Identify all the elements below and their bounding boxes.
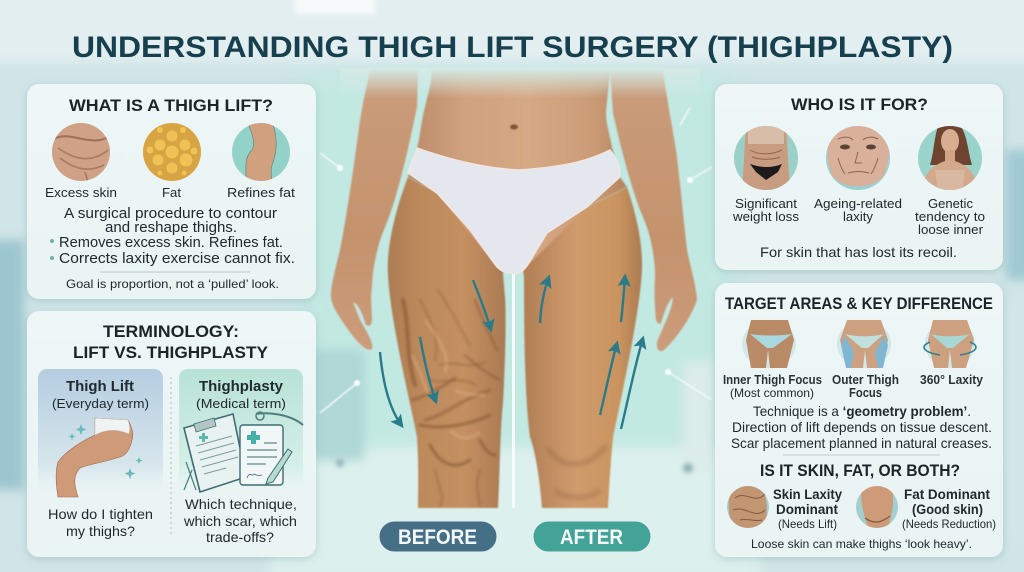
photo: genetic tendency (918, 126, 982, 190)
audience labels: Significant (735, 196, 797, 211)
heading: WHO IS IT FOR? (791, 95, 928, 114)
icon: clipboard and medical document (184, 412, 303, 492)
column: thighplasty: which scar, which (183, 513, 297, 529)
icon: leg side view (56, 418, 142, 497)
skin dimples on left thigh (403, 290, 500, 505)
technique description (731, 403, 992, 451)
column: thighplasty (179, 369, 303, 545)
column: thigh lift: my thighs? (66, 523, 135, 539)
target labels: (Most common) (730, 386, 814, 400)
column: thighplasty: (Medical term) (196, 396, 286, 411)
panel: what is a thigh lift: Fat (162, 185, 181, 200)
subheading: IS IT SKIN, FAT, OR BOTH? (760, 461, 960, 480)
heading: TARGET AREAS & KEY DIFFERENCE (725, 294, 993, 313)
icon: excess skin (52, 123, 110, 181)
question: Which technique, (185, 496, 297, 512)
top fade over body (340, 68, 700, 98)
panel: terminology (27, 311, 316, 557)
column: thigh lift: Thigh Lift (66, 378, 134, 395)
description: A surgical procedure to contour (64, 206, 277, 222)
before label: BEFORE (398, 526, 477, 549)
skin laxity label: Dominant (776, 502, 838, 517)
left thigh before surgery (388, 177, 506, 508)
description: Removes excess skin. Refines fat. (59, 235, 283, 251)
audience labels: Ageing-related (814, 196, 902, 211)
panel: target areas and key difference (715, 283, 1003, 557)
column: thighplasty: trade-offs? (206, 529, 274, 545)
description (50, 206, 295, 267)
icon: refines fat (232, 123, 290, 181)
thumb: inner thigh (742, 320, 796, 368)
icon: fat (143, 123, 201, 181)
technique description: Technique is a ‘geometry problem’. (753, 403, 971, 419)
fat dominant label (902, 487, 996, 531)
right thigh after surgery (523, 187, 642, 508)
heading: WHAT IS A THIGH LIFT? (69, 96, 273, 115)
target labels: Outer Thigh (832, 373, 899, 387)
skin laxity label: Skin Laxity (773, 487, 842, 502)
fat dominant label: (Needs Reduction) (902, 517, 996, 531)
right knee shading (548, 445, 606, 498)
after label: AFTER (560, 526, 623, 549)
fat dominant label: (Good skin) (912, 502, 983, 517)
skin laxity label: (Needs Lift) (778, 517, 837, 531)
target labels: Inner Thigh Focus (723, 373, 822, 387)
summary: For skin that has lost its recoil. (760, 244, 957, 260)
right arm and hand (610, 70, 697, 351)
photo: ageing-related laxity (826, 126, 890, 190)
question: How do I tighten (48, 506, 153, 522)
column: thigh lift (38, 369, 163, 539)
heading: LIFT VS. THIGHPLASTY (73, 343, 269, 362)
heading: TERMINOLOGY: (103, 322, 239, 341)
navel (510, 124, 518, 130)
title: UNDERSTANDING THIGH LIFT SURGERY (THIGHPLASTY) (72, 31, 953, 64)
description: Corrects laxity exercise cannot fix. (59, 251, 295, 267)
target labels (723, 373, 983, 400)
heading (73, 322, 269, 362)
photo: significant weight loss (734, 126, 798, 190)
thumb: 360 laxity (924, 320, 976, 368)
highlights on left thigh (412, 320, 485, 438)
left arm and hand (331, 70, 418, 350)
goal note: Goal is proportion, not a ‘pulled’ look. (66, 277, 279, 291)
audience labels: loose inner (918, 222, 984, 237)
after label (533, 521, 651, 552)
centre divider line (512, 274, 515, 508)
technique description: Scar placement planned in natural creases. (731, 435, 992, 451)
column: thigh lift: (Everyday term) (52, 396, 149, 411)
photo: skin laxity (727, 486, 769, 528)
before and after body photo illustration (331, 68, 700, 508)
underwear (408, 148, 620, 273)
audience labels: tendency to (915, 209, 985, 224)
target labels: 360° Laxity (920, 373, 983, 387)
fat dominant label: Fat Dominant (904, 487, 990, 502)
note: Loose skin can make thighs ‘look heavy’. (751, 537, 972, 551)
torso (408, 70, 627, 270)
audience labels: laxity (843, 209, 873, 224)
panel: what is a thigh lift: Refines fat (227, 185, 295, 200)
skin laxity label (773, 487, 842, 531)
before label (379, 521, 497, 552)
arrows: tissue descent before and lift after (380, 276, 643, 429)
audience labels (732, 196, 985, 237)
panel: what is a thigh lift (27, 84, 316, 299)
panel: who is it for (715, 84, 1003, 270)
icon labels: Excess skin (45, 185, 117, 200)
audience labels: weight loss (732, 209, 800, 224)
thumb: outer thigh (837, 320, 891, 368)
photo: fat dominant (856, 486, 898, 528)
column: thighplasty: Thighplasty (199, 378, 284, 395)
audience labels: Genetic (928, 196, 973, 211)
description: and reshape thighs. (105, 220, 237, 236)
technique description: Direction of lift depends on tissue descent. (732, 419, 992, 435)
target labels: Focus (849, 386, 882, 400)
